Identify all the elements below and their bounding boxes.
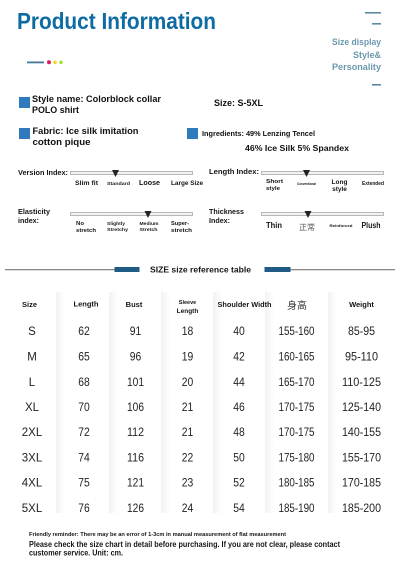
version index slider: Large Size: [171, 180, 203, 187]
footer note: customer service. Unit: cm.: [29, 548, 123, 558]
table header row: 身高: [287, 299, 307, 312]
table row L: 44: [233, 377, 245, 389]
table row 5XL: [22, 503, 381, 515]
section heading: size reference table: SIZE size reference table: [150, 264, 251, 274]
table row M: 160-165: [278, 351, 314, 363]
table row 2XL: 2XL: [22, 427, 43, 439]
length index slider: style: [266, 186, 280, 192]
product info: ingredients: Ingredients: 49% Lenzing Tencel: [202, 131, 315, 138]
table row XL: 46: [233, 402, 245, 414]
table row L: 20: [182, 377, 193, 389]
table row XL: [25, 402, 381, 414]
table row 4XL: 170-185: [342, 477, 381, 489]
elasticity index slider: Medium: [140, 221, 158, 226]
table row 2XL: 112: [127, 427, 144, 439]
table row S: 62: [78, 326, 90, 338]
footer note: Friendly reminder: There may be an error of 1-3cm in manual measurement of flat measurement: [29, 532, 286, 538]
table row S: 91: [130, 326, 141, 338]
table row S: 85-95: [348, 326, 375, 338]
table row 4XL: 121: [127, 477, 144, 489]
version index slider: Loose: [139, 178, 160, 187]
title accent: line and three dots: [27, 60, 63, 64]
table row XL: 21: [182, 402, 193, 414]
table row L: 165-170: [278, 377, 314, 389]
product info: style name: Style name: Colorblock collar: [32, 94, 161, 105]
table row L: 68: [78, 377, 90, 389]
table row 2XL: 140-155: [342, 427, 381, 439]
length index slider: Short: [266, 179, 283, 185]
product info: ingredients: [187, 128, 349, 153]
footer note: [29, 532, 340, 558]
version index slider: Standard: [107, 181, 130, 186]
product info: size: Size: S-5XL: [214, 98, 263, 109]
table row S: 155-160: [278, 326, 314, 338]
side note: size display, style and personality: Size display: [332, 37, 382, 48]
elasticity index slider: Elasticity: [18, 207, 51, 216]
table row XL: 170-175: [278, 402, 314, 414]
table row 3XL: 116: [127, 452, 144, 464]
length index slider: style: [332, 186, 347, 193]
table row 2XL: 48: [233, 427, 245, 439]
table row 4XL: 180-185: [278, 477, 314, 489]
elasticity index slider: Slightly: [107, 221, 126, 226]
table row 3XL: 175-180: [278, 452, 314, 464]
product info: fabric: Fabric: Ice silk imitation: [32, 126, 139, 137]
table header row: [22, 299, 374, 315]
product info: fabric: cotton pique: [32, 137, 90, 148]
table row 5XL: 54: [233, 503, 245, 515]
length index slider: [209, 167, 384, 193]
table header row: Size: [22, 300, 37, 309]
thickness index slider: Index:: [209, 216, 230, 225]
elasticity index slider: index:: [18, 216, 39, 225]
table row XL: XL: [25, 402, 40, 414]
table row L: L: [29, 377, 36, 389]
version index slider: Version Index:: [18, 168, 68, 177]
table row 3XL: 22: [182, 452, 193, 464]
table row 5XL: 185-190: [278, 503, 314, 515]
table row L: 101: [127, 377, 144, 389]
table row XL: 70: [78, 402, 90, 414]
side note: size display, style and personality: Personality: [332, 62, 382, 73]
table header row: Sleeve: [179, 300, 196, 306]
table row L: 110-125: [342, 377, 381, 389]
version index slider: Slim fit: [75, 180, 99, 187]
table column shading: [56, 292, 337, 513]
table row 3XL: 3XL: [22, 452, 43, 464]
table row 2XL: 21: [182, 427, 193, 439]
elasticity index slider: Stretch: [140, 227, 158, 232]
title: Product Information: [17, 8, 216, 34]
elasticity index slider: No: [76, 221, 84, 227]
thickness index slider: [209, 207, 384, 232]
table row 5XL: 185-200: [342, 503, 381, 515]
elasticity index slider: stretch: [76, 228, 96, 234]
elasticity index slider: Super-: [171, 221, 189, 227]
length index slider: Extended: [362, 181, 384, 187]
table row S: 18: [182, 326, 193, 338]
side note: size display, style and personality: Style&: [353, 50, 381, 61]
elasticity index slider: Stretchy: [107, 227, 129, 232]
table row 2XL: [22, 427, 381, 439]
footer note: Please check the size chart in detail before purchasing. If you are not clear, please contact: [29, 540, 340, 549]
table row S: S: [28, 326, 36, 338]
table row M: [27, 351, 378, 363]
product info: ingredients: 46% Ice Silk 5% Spandex: [245, 143, 349, 153]
table row 5XL: 76: [78, 503, 90, 515]
table row S: [28, 326, 375, 338]
thickness index slider: Reinforced: [330, 224, 352, 228]
table header row: Shoulder Width: [218, 302, 272, 309]
length index slider: Length Index:: [209, 167, 259, 176]
elasticity index slider: [18, 207, 192, 234]
table row M: 95-110: [345, 351, 378, 363]
product info: style name: [19, 94, 161, 116]
table row 4XL: 4XL: [22, 477, 43, 489]
table row 4XL: 23: [182, 477, 193, 489]
table header row: Weight: [349, 300, 374, 309]
table row 4XL: 75: [78, 477, 90, 489]
table header row: Bust: [126, 300, 143, 309]
section heading: size reference table: [5, 264, 395, 274]
length index slider: Conventional: [297, 182, 316, 186]
table row XL: 106: [127, 402, 144, 414]
table row 3XL: 74: [78, 452, 90, 464]
length index slider: Long: [332, 179, 347, 186]
table row 3XL: 155-170: [342, 452, 381, 464]
table row XL: 125-140: [342, 402, 381, 414]
table row 4XL: [22, 477, 381, 489]
table row 5XL: 5XL: [22, 503, 43, 515]
table row 3XL: 50: [233, 452, 245, 464]
table row 2XL: 72: [78, 427, 90, 439]
table row M: M: [27, 351, 37, 363]
table row 3XL: [22, 452, 381, 464]
table row M: 19: [182, 351, 193, 363]
table row 2XL: 170-175: [278, 427, 314, 439]
table row M: 42: [233, 351, 245, 363]
table row 4XL: 52: [233, 477, 245, 489]
table row S: 40: [233, 326, 245, 338]
table header row: Length: [177, 308, 198, 315]
side note: size display, style and personality: [332, 12, 382, 86]
table row L: [29, 377, 381, 389]
table row 5XL: 126: [127, 503, 144, 515]
thickness index slider: Thin: [266, 221, 282, 230]
thickness index slider: 正常: [299, 223, 315, 232]
table row M: 96: [130, 351, 141, 363]
thickness index slider: Plush: [362, 221, 381, 230]
table row M: 65: [78, 351, 90, 363]
table row 5XL: 24: [182, 503, 194, 515]
table header row: Length: [74, 300, 99, 308]
version index slider: [18, 168, 203, 187]
product info: fabric: [19, 126, 139, 148]
product info: style name: POLO shirt: [32, 105, 80, 116]
thickness index slider: Thickness: [209, 207, 244, 216]
elasticity index slider: stretch: [171, 228, 192, 234]
